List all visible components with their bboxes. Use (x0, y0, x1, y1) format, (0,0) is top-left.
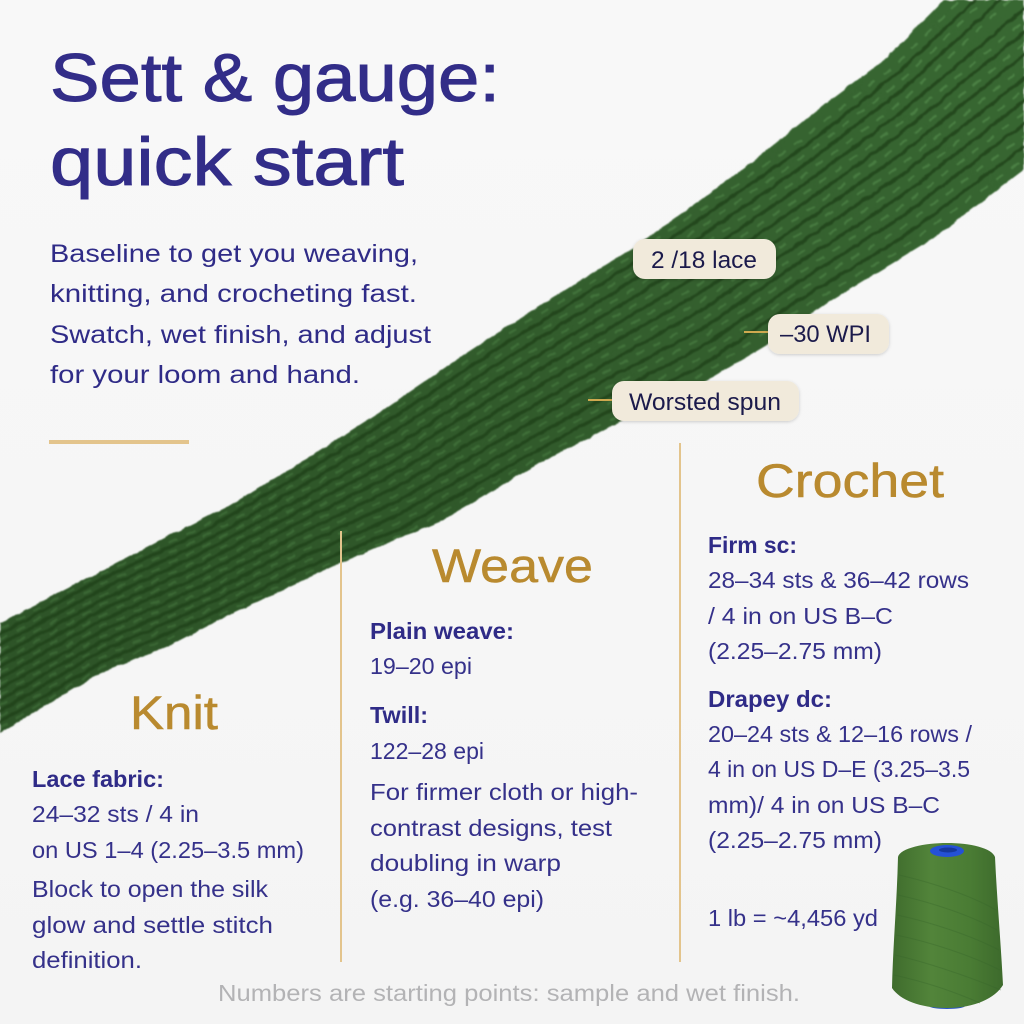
callout: 2/18 lace (633, 239, 776, 279)
heading: crochet: Crochet (756, 454, 944, 507)
callout: worsted spun: Worsted spun (629, 389, 781, 416)
weave details: contrast designs, test (370, 815, 613, 841)
crochet details: Drapey dc: (708, 686, 832, 712)
callout: 30 WPI: –30 WPI (780, 321, 871, 348)
knit details: 24–32 sts / 4 in (32, 801, 199, 827)
crochet details: (2.25–2.75 mm) (708, 638, 882, 664)
callout: 30 WPI (744, 314, 889, 354)
title: quick start (50, 124, 404, 200)
panel: weave (370, 539, 638, 912)
knit details: Lace fabric: (32, 766, 164, 792)
weave details: doubling in warp (370, 850, 561, 876)
title: Sett & gauge: (50, 40, 500, 116)
panel: crochet (708, 454, 972, 931)
icon: yarn cone (892, 843, 1003, 1009)
knit details: definition. (32, 947, 142, 973)
yarn strand bundle (0, 0, 1024, 733)
crochet details: 28–34 sts & 36–42 rows (708, 567, 969, 593)
heading: knit: Knit (130, 686, 218, 739)
crochet details: 4 in on US D–E (3.25–3.5 (708, 756, 970, 782)
crochet details: Firm sc: (708, 532, 797, 558)
title (50, 40, 500, 200)
weave details: For firmer cloth or high- (370, 779, 638, 805)
heading: weave: Weave (432, 539, 593, 592)
crochet details: 20–24 sts & 12–16 rows / (708, 721, 972, 747)
knit details (32, 766, 304, 973)
column rule right (679, 443, 681, 962)
crochet details: / 4 in on US B–C (708, 603, 893, 629)
intro text: for your loom and hand. (50, 361, 360, 389)
callout: 2/18 lace: 2 /18 lace (651, 247, 757, 274)
weave details (370, 618, 638, 912)
panel: knit (32, 686, 304, 973)
crochet details: 1 lb = ~4,456 yd (708, 905, 878, 931)
crochet details (708, 532, 972, 931)
intro text: knitting, and crocheting fast. (50, 280, 417, 308)
column rule left (340, 531, 342, 962)
crochet details: (2.25–2.75 mm) (708, 827, 882, 853)
knit details: glow and settle stitch (32, 912, 273, 938)
footnote: Numbers are starting points: sample and wet finish. (218, 980, 800, 1006)
knit details: on US 1–4 (2.25–3.5 mm) (32, 837, 304, 863)
weave details: Twill: (370, 702, 428, 728)
callout: worsted spun (588, 381, 799, 421)
crochet details: mm)/ 4 in on US B–C (708, 792, 940, 818)
intro text (50, 240, 431, 389)
intro text: Swatch, wet finish, and adjust (50, 321, 431, 349)
weave details: (e.g. 36–40 epi) (370, 886, 544, 912)
weave details: 19–20 epi (370, 653, 472, 679)
gold divider (49, 440, 189, 444)
weave details: Plain weave: (370, 618, 514, 644)
weave details: 122–28 epi (370, 738, 484, 764)
knit details: Block to open the silk (32, 876, 268, 902)
intro text: Baseline to get you weaving, (50, 240, 418, 268)
